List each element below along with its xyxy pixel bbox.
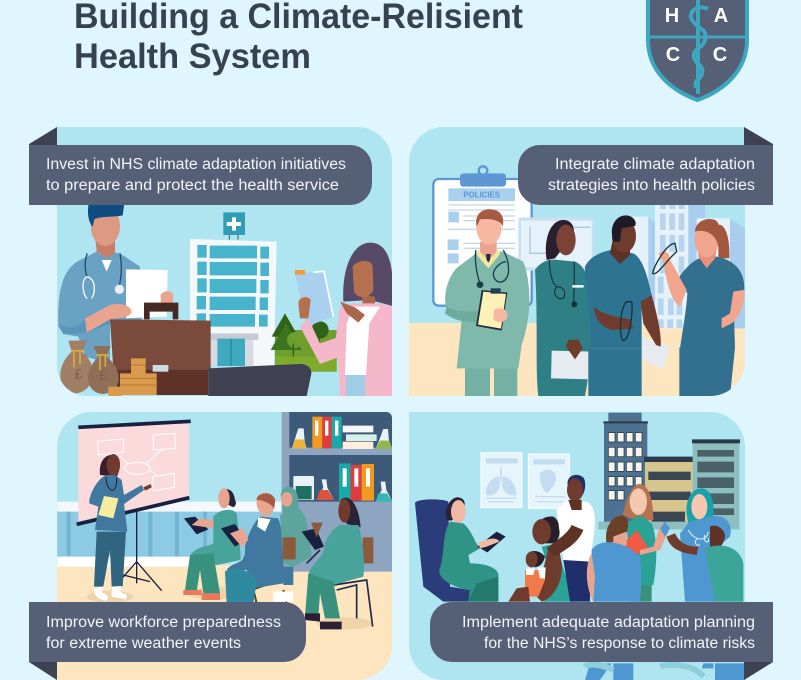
caption: implement [430,602,773,662]
illustration: doctor [58,203,173,363]
illustration: presenter [87,454,152,603]
icon: city buildings [598,413,740,529]
icon: trees [271,313,337,372]
caption: integrate: Integrate climate adaptation [555,156,755,173]
panel: adaptation planning [409,412,773,680]
fold [29,127,57,145]
icon: background document [518,217,594,271]
panel: workforce preparedness [29,412,393,680]
icon: city buildings [630,205,745,328]
caption: improve: for extreme weather events [46,635,241,652]
illustration: seated attendee one [183,488,247,600]
panel: invest in NHS adaptation [29,127,393,396]
caption: integrate [518,145,773,205]
icon: money bags: £ [99,368,107,383]
icon: medical posters [481,453,569,508]
icon: policies clipboard [433,166,532,306]
caption: integrate: strategies into health policies [548,177,755,194]
illustration: standing father [547,475,595,602]
illustration: woman with clipboard [295,243,393,396]
caption: implement: for the NHS’s response to climate risks [484,635,755,652]
icon: lab shelves [282,412,393,572]
fold [29,662,57,680]
dark desk [208,364,311,396]
caption: invest [29,145,372,205]
caption: improve [29,602,306,662]
icon: money bags: £ [74,365,82,381]
logo: HACC shield: C [666,44,680,66]
icon: hospital building [190,212,277,366]
logo: HACC shield: H [665,5,679,27]
logo: HACC shield [648,0,747,100]
illustration: seated attendee two [221,492,288,602]
caption: improve: Improve workforce preparedness [46,614,281,631]
illustration: doctor in green coat [445,209,529,396]
panel: integrate into policies [409,127,773,396]
icon: policies clipboard: POLICIES [463,191,501,200]
illustration: attendee four [302,498,373,629]
caption: invest: Invest in NHS climate adaptation initiatives [46,156,346,173]
illustration: seated clinician [415,497,506,602]
title: Health System [74,37,311,76]
logo: HACC shield: C [713,44,727,66]
icon: money bags [60,341,119,394]
illustration: briefcase [110,303,211,395]
illustration: projector screen [77,421,191,591]
title [74,0,523,76]
caption: invest: to prepare and protect the health service [46,177,339,194]
illustration: nurse with tablet [535,220,595,396]
logo: HACC shield: A [714,5,728,27]
fold [744,127,773,145]
illustration: male nurse [585,215,669,396]
illustration: female nurse [653,219,744,396]
illustration: colleagues group [585,484,745,680]
caption: implement: Implement adequate adaptation planning [462,614,755,631]
fold [744,662,773,680]
illustration: seated mother and child [508,516,573,602]
wall trim [57,502,282,567]
icon: coin stacks [108,358,157,396]
illustration: attendee three in hijab [273,486,312,602]
